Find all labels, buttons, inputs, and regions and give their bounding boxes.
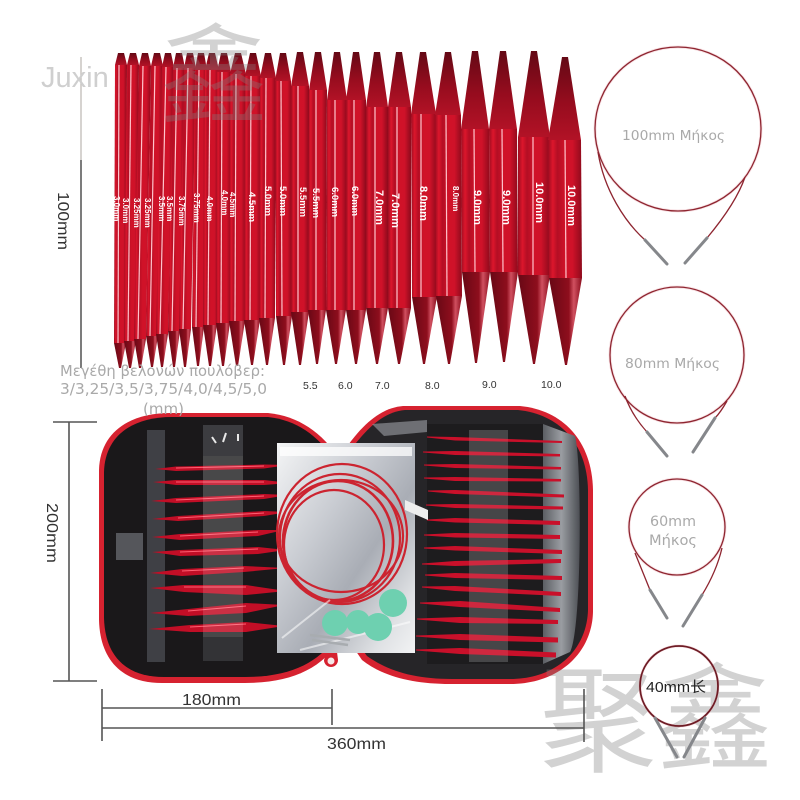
cable: 80mm	[610, 287, 744, 456]
panel: right half of open case	[338, 406, 593, 684]
dimension: 200mm height: 200mm	[43, 503, 60, 563]
dimension: 180mm width	[102, 689, 332, 741]
needle tips row: 26 interchangeable double-pointed tips: 5.5mm	[310, 188, 321, 218]
watermark: bottom right: 鑫	[657, 626, 773, 794]
dimension: 360mm width: 360mm	[327, 736, 386, 753]
left case needles	[149, 464, 290, 632]
caption: needle sizes: Μεγέθη βελονών πουλόβερ:	[60, 362, 265, 380]
needle tips row: 26 interchangeable double-pointed tips: 3.0mm	[112, 196, 121, 221]
needle tips row: 26 interchangeable double-pointed tips: 5.0mm	[277, 186, 288, 216]
size tick labels under needles: 8.0	[425, 380, 440, 392]
size tick labels under needles: 6.0	[338, 380, 353, 392]
needle tips row: 26 interchangeable double-pointed tips: 8.0mm	[451, 186, 460, 211]
needle tips row: 26 interchangeable double-pointed tips: 3.5mm	[165, 196, 174, 221]
size tick labels under needles: 10.0	[541, 379, 562, 391]
right case needles	[416, 436, 564, 658]
needle tips row: 26 interchangeable double-pointed tips: 7.0mm	[373, 190, 385, 225]
needle tips row: 26 interchangeable double-pointed tips: 3.0mm	[121, 198, 130, 223]
size tick labels under needles: 7.0	[375, 380, 390, 392]
needle tips row: 26 interchangeable double-pointed tips: 5.0mm	[262, 186, 273, 216]
needle tips row: 26 interchangeable double-pointed tips: 10.0mm	[533, 182, 545, 223]
watermark: bottom right: 聚	[540, 628, 656, 796]
label: 100mm Μήκος	[622, 128, 725, 144]
label	[649, 514, 697, 549]
caption: needle sizes: 3/3,25/3,5/3,75/4,0/4,5/5,0	[60, 380, 267, 398]
needle tips row: 26 interchangeable double-pointed tips: 10.0mm	[565, 185, 577, 226]
label: 80mm Μήκος	[625, 356, 720, 372]
needle tips row: 26 interchangeable double-pointed tips: 4.0mm	[205, 196, 214, 221]
dimension: 200mm height	[43, 422, 97, 681]
dimension: 180mm width: 180mm	[182, 692, 241, 709]
needle tips row: 26 interchangeable double-pointed tips: 9.0mm	[471, 190, 483, 225]
size tick labels under needles: 9.0	[482, 379, 497, 391]
cable: 60mm	[629, 479, 725, 626]
needle tips row: 26 interchangeable double-pointed tips: 8.0mm	[417, 186, 429, 221]
zipper pull	[324, 648, 338, 667]
label: 40mm长	[646, 679, 707, 696]
needle tips row: 26 interchangeable double-pointed tips: 3.75mm	[177, 196, 186, 226]
needle tips row: 26 interchangeable double-pointed tips: 3.75mm	[192, 193, 201, 223]
label: 60mm	[650, 514, 696, 530]
needle tips row: 26 interchangeable double-pointed tips: 6.0mm	[349, 186, 360, 216]
needle tips row: 26 interchangeable double-pointed tips	[112, 51, 582, 368]
needle tips row: 26 interchangeable double-pointed tips: 3.5mm	[157, 196, 166, 221]
needle tips row: 26 interchangeable double-pointed tips: 3.25mm	[143, 198, 152, 228]
mint stoppers	[322, 589, 407, 641]
dimension: 360mm width	[102, 689, 584, 753]
caption: needle sizes: (mm)	[143, 400, 184, 418]
watermark text: Juxin: Juxin	[41, 62, 109, 94]
cable: 40mm	[640, 646, 718, 757]
size tick labels under needles: 5.5	[303, 380, 318, 392]
needle tips row: 26 interchangeable double-pointed tips: 5.5mm	[297, 187, 308, 217]
needle tips row: 26 interchangeable double-pointed tips: 4.5mm	[246, 192, 257, 222]
caption: needle sizes	[60, 362, 267, 418]
label: Μήκος	[649, 533, 697, 549]
cable: 100mm	[595, 47, 761, 264]
size scale: 100mm: 100mm	[54, 192, 71, 250]
needle tips row: 26 interchangeable double-pointed tips: 4.5mm	[228, 192, 237, 217]
needle tips row: 26 interchangeable double-pointed tips: 6.0mm	[329, 187, 340, 217]
panel: left half of open case	[99, 413, 340, 683]
needle tips row: 26 interchangeable double-pointed tips: 4.0mm	[220, 190, 229, 215]
size tick labels under needles	[303, 379, 562, 392]
accessory bag with cables and stoppers	[277, 443, 428, 653]
coiled red cables	[277, 464, 407, 604]
needle tips row: 26 interchangeable double-pointed tips: 7.0mm	[389, 193, 401, 228]
needle tips row: 26 interchangeable double-pointed tips: 9.0mm	[500, 190, 512, 225]
metal connectors	[310, 635, 350, 645]
watermark: bottom right	[540, 626, 773, 796]
needle tips row: 26 interchangeable double-pointed tips: 3.25mm	[132, 198, 141, 228]
